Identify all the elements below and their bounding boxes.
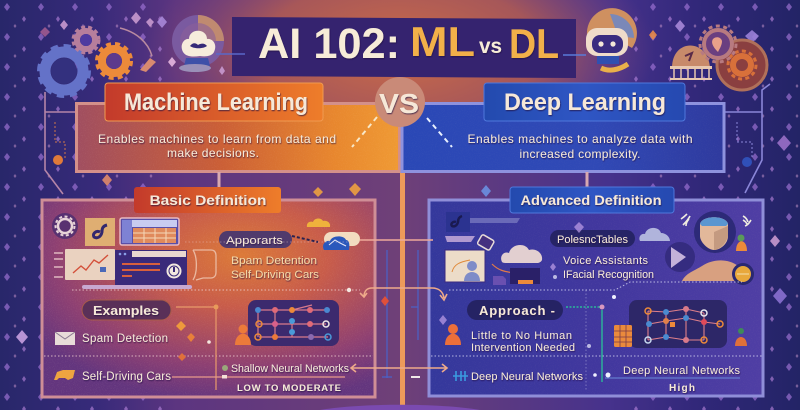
dot marker	[222, 365, 228, 371]
lower right panel	[429, 200, 763, 396]
network diagram	[248, 300, 339, 346]
heading: Deep Learning	[484, 83, 685, 121]
left gears	[40, 27, 152, 95]
icon: signal marks	[681, 214, 751, 226]
icon: gold cloud	[307, 218, 330, 227]
text: Voice Assistants: IFacial Recognition	[563, 269, 654, 281]
text: DL description: Enables machines to analyze data with	[468, 132, 692, 146]
heading: Basic Definition: Basic Definition	[150, 192, 266, 208]
dashed arrow	[427, 118, 452, 147]
icon: pencil tag	[140, 58, 156, 72]
arrow: elbow across panels	[360, 288, 447, 300]
network diagram	[629, 300, 727, 348]
icon: coin	[732, 263, 754, 285]
icon: person	[235, 324, 251, 345]
text: ML description: make decisions.	[167, 146, 259, 160]
title text: ML	[410, 18, 475, 65]
text: Voice Assistants	[563, 255, 654, 281]
icon: tag	[477, 234, 495, 251]
icon: blue gear	[40, 47, 88, 95]
decorative sparkle cluster	[16, 12, 791, 344]
icon: outlined seat	[193, 250, 216, 280]
connectors below summary	[219, 172, 587, 187]
text: Spam Detection: Spam Detection	[82, 333, 168, 345]
small devices	[492, 264, 540, 285]
pill: PolesncTables: PolesncTables	[557, 234, 628, 246]
pill: Examples	[82, 300, 171, 320]
dashboard window	[115, 250, 187, 286]
icon: left robot	[172, 15, 245, 72]
icon: plant person	[736, 234, 747, 251]
right sparkles overlay	[439, 222, 591, 348]
pill: Approach	[467, 300, 563, 320]
title text: AI 102:	[258, 20, 400, 68]
connector	[176, 304, 218, 390]
icon: pink gear	[73, 27, 99, 53]
heading: Advanced Definition	[510, 187, 674, 213]
mid-gutter blue lines	[381, 250, 420, 378]
central divider	[400, 122, 405, 410]
text: DL description	[468, 132, 692, 161]
text: Voice Assistants: Voice Assistants	[563, 255, 648, 267]
text: High: High	[669, 383, 695, 394]
input arrows	[54, 253, 63, 277]
applications text: Bpam Detention	[231, 255, 317, 267]
text: DL description: increased complexity.	[520, 147, 640, 161]
pill: Apporarts: Apporarts	[226, 235, 284, 247]
rule under depth	[605, 377, 740, 379]
arrow: refresh arc	[120, 28, 152, 56]
icon: grid block	[614, 325, 632, 347]
icon: blue hash	[453, 371, 468, 381]
text: Little to No Human: Intervention Needed	[471, 342, 575, 354]
bottom glow edge	[320, 405, 480, 410]
title banner	[232, 17, 576, 78]
chart tile	[65, 249, 115, 280]
dashed arrow	[352, 117, 377, 147]
laptop base	[82, 285, 192, 289]
applications text	[231, 255, 320, 281]
text: Little to No Human	[471, 330, 575, 354]
text: ML description: Enables machines to learn from data and	[98, 132, 336, 146]
connector: across panels top	[360, 239, 433, 241]
connector: teal	[566, 304, 604, 382]
panel: deep learning summary	[402, 104, 724, 172]
heading: Machine Learning	[105, 83, 323, 121]
icon: settings gear	[52, 213, 78, 239]
icon: photo tile	[445, 250, 485, 282]
icon: music tile	[85, 218, 115, 246]
heading: Deep Learning: Deep Learning	[504, 89, 666, 116]
pill: PolesncTables	[550, 230, 635, 247]
icon: hill	[682, 260, 740, 281]
pill: Approach: Approach -	[479, 303, 555, 318]
text: Shallow Neural Networks: Shallow Neural Networks	[231, 363, 349, 375]
connector dotted	[292, 236, 318, 242]
heading: Advanced Definition: Advanced Definition	[520, 192, 662, 208]
heading: Machine Learning: Machine Learning	[124, 89, 308, 116]
left circuit lines	[45, 92, 76, 194]
text: Self-Driving Cars: Self-Driving Cars	[82, 371, 171, 383]
badge: VS	[375, 77, 425, 127]
text: Deep Neural Networks: Deep Neural Networks	[471, 371, 584, 383]
text: ML description	[98, 132, 336, 160]
icon: AI head	[694, 211, 736, 253]
icon: small cloud	[639, 228, 670, 241]
title text	[258, 18, 559, 68]
icon: large gear badge	[717, 40, 767, 90]
applications text: Self-Driving Cars	[231, 269, 320, 281]
icon: blue cloud	[323, 232, 360, 250]
heading: Basic Definition	[134, 187, 281, 213]
icon: observatory dome	[670, 46, 712, 80]
icon: large cloud	[501, 245, 542, 263]
lower left panel	[42, 200, 375, 397]
icon: orange gear	[97, 44, 131, 78]
dot connector	[593, 372, 610, 378]
icon: play	[665, 242, 695, 272]
icon: music tile	[445, 212, 520, 242]
icon: spreadsheet window	[120, 218, 179, 245]
icon: pin gear badge	[700, 26, 736, 62]
pill: Apporarts	[219, 231, 292, 248]
panel: machine learning summary	[76, 104, 400, 172]
arrow: double headed across panels	[351, 364, 447, 372]
title text: vs	[479, 35, 502, 58]
text: Little to No Human: Little to No Human	[471, 330, 572, 342]
pill: Examples: Examples	[93, 304, 159, 318]
sparkle markers	[176, 321, 211, 361]
connector to low-moderate	[172, 375, 345, 378]
icon: envelope	[55, 332, 75, 345]
icon: person	[445, 324, 461, 345]
right circuit lines	[724, 84, 770, 193]
text: low to moderate: LOW TO MODERATE	[237, 383, 341, 394]
icon: right robot	[563, 8, 637, 70]
title text: DL	[509, 20, 559, 67]
icon: plant	[735, 328, 747, 346]
text: Deep Neural Networks right: Deep Neural Networks	[623, 365, 740, 377]
badge: VS: VS	[379, 88, 419, 119]
icon: car envelope	[54, 370, 75, 380]
